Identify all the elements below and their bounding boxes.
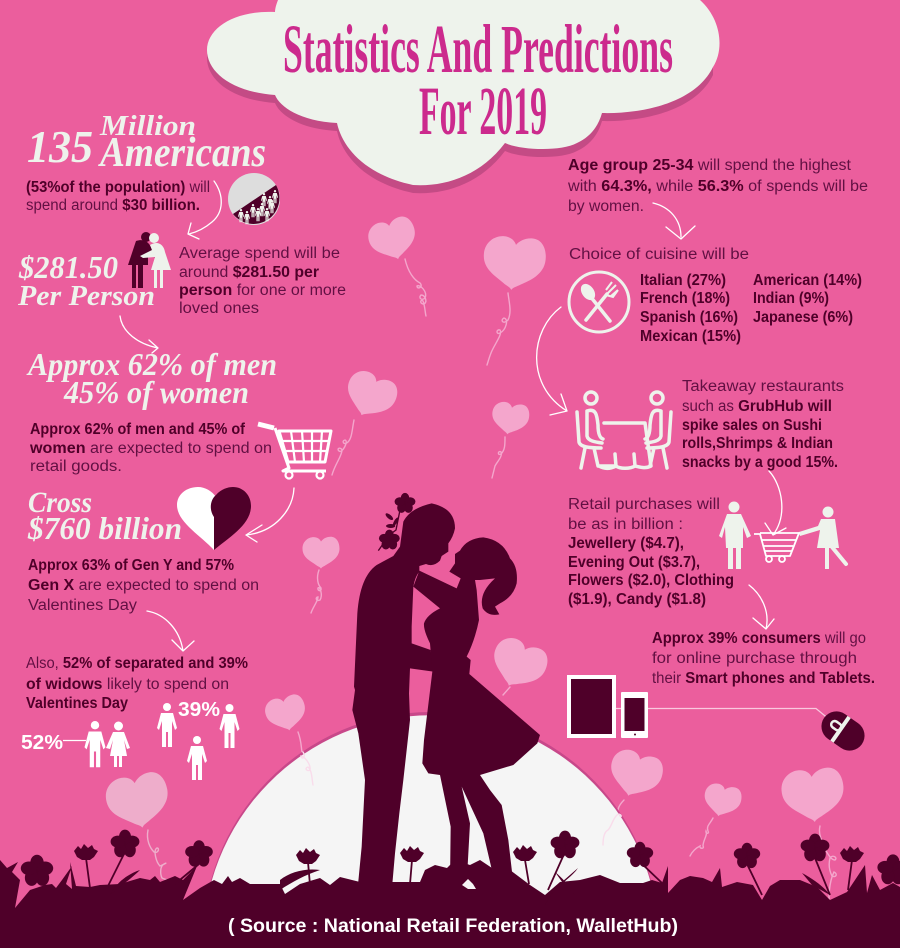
title: For 2019 [419,73,547,149]
text: separated and widows [26,655,248,712]
list: cuisine column one [640,272,741,345]
headline: 135 million Americans: 135 [27,121,93,172]
rose [378,493,415,551]
text: retail purchases: Evening Out ($3.7), [568,554,700,571]
arrow: to average spend [188,181,221,239]
headline: cross $760 billion [27,486,182,546]
arrow: cuisine to table [537,307,567,415]
icon: hugging couple [128,232,171,288]
text: online purchase: for online purchase through [652,650,857,667]
text: choice of cuisine: Choice of cuisine will be [569,246,749,263]
headline: $281.50 per person [17,249,155,312]
stat: 52% separated: 52% [21,732,63,754]
icon: tablet [569,677,614,736]
text: retail purchases: ($1.9), Candy ($1.8) [568,591,706,608]
headline: approx men and women [26,346,277,410]
text: population: spend around $30 billion. [26,197,200,214]
text: separated and widows: Valentines Day [26,695,128,712]
arrow: takeaway to cart [765,471,786,535]
connector line [616,708,830,720]
text: retail purchases: Retail purchases will [568,496,720,513]
headline: $281.50 per person: $281.50 [18,249,118,285]
text: retail purchases: Jewellery ($4.7), [568,535,684,552]
text: gen y and gen x: Valentines Day [28,597,137,614]
text: gen y and gen x: Gen X are expected to spend on [28,577,259,594]
couple silhouette [352,493,540,892]
woman [413,537,540,883]
text: population: (53%of the population) will [26,179,210,196]
balloon 8 [103,770,174,882]
title [283,11,673,149]
text: separated and widows: Also, 52% of separated and 39% [26,655,248,672]
arrow: to heart [246,488,294,542]
headline: cross $760 billion: Cross [28,486,92,519]
headline: cross $760 billion: $760 billion [27,510,182,546]
headline: $281.50 per person: Per Person [17,280,155,312]
text: average spend: around $281.50 per [179,264,319,281]
headline: approx men and women: Approx 62% of men [26,346,277,382]
icon: smartphone [621,692,648,738]
arrow: to cuisine [653,203,695,239]
text: population [26,179,210,214]
text: gen y and gen x: Approx 63% of Gen Y and 57% [28,557,234,574]
text: online purchase: Approx 39% consumers will go [652,630,866,647]
list: cuisine column two: Indian (9%) [753,290,829,307]
text: separated and widows: of widows likely to spend on [26,676,229,693]
text: retail goods: Approx 62% of men and 45% of [30,421,246,438]
headline: 135 million Americans: Americans [97,130,266,176]
stat: 39% widows [157,699,240,780]
man [352,503,455,892]
text: age group [567,157,868,215]
balloon 1 [365,214,426,316]
text: average spend: person for one or more [179,282,346,299]
text: retail goods: retail goods. [30,458,122,475]
balloon 9 string over moon [603,814,621,845]
text: takeaway restaurants: snacks by a good 15%. [682,454,838,471]
text: retail purchases: Flowers ($2.0), Clothing [568,572,734,589]
icon: split heart [177,487,251,550]
stat: 39% widows: 39% [178,699,220,721]
cloud title panel [207,0,720,193]
arrow: to men and women [120,316,158,353]
balloon 7 string over moon [301,752,313,785]
icon: mouse [816,706,870,756]
balloon 2 [480,234,548,365]
text: age group: with 64.3%, while 56.3% of spends will be [567,178,868,195]
arrow: to separated [147,611,194,651]
arrow: retail to online [749,585,774,629]
text: gen y and gen x [28,557,259,614]
icon: shopping cart [258,424,331,478]
headline: 135 million Americans [27,110,266,176]
footer source: ( Source : National Retail Federation, WalletHub) [228,915,678,937]
headline: approx men and women: 45% of women [63,374,249,410]
balloon 6 [484,632,552,697]
stems and leaves [86,852,852,895]
list: cuisine column one: French (18%) [640,290,730,307]
text: online purchase: their Smart phones and Tablets. [652,670,875,687]
text: online purchase [652,630,875,687]
text: average spend [179,245,346,317]
text: takeaway restaurants: rolls,Shrimps & Indian [682,435,833,452]
icon: shoppers with cart [719,502,846,569]
balloon 10 [690,781,744,856]
list: cuisine column two: American (14%) [753,272,862,289]
text: age group: Age group 25-34 will spend the highest [568,157,852,174]
text: takeaway restaurants: Takeaway restaurants [682,378,844,395]
icon: population circle [228,173,280,225]
list: cuisine column two: Japanese (6%) [753,309,853,326]
text: average spend: Average spend will be [179,245,340,262]
flowers [21,855,53,886]
balloon 5 [302,537,340,613]
text: takeaway restaurants [682,378,844,471]
balloon 4 [489,400,531,478]
stat: 52% separated [21,721,130,767]
list: cuisine column one: Spanish (16%) [640,309,738,326]
text: retail purchases: be as in billion : [568,516,683,533]
icon: spoon and fork [569,272,629,332]
balloon 9 [603,745,667,845]
balloon 11 [780,767,846,900]
balloon 3 [332,366,402,475]
balloon 7 [263,693,313,785]
text: takeaway restaurants: such as GrubHub will [682,398,832,415]
list: cuisine column one: Italian (27%) [640,272,726,289]
ground and flowers silhouette [0,830,900,948]
list: cuisine column one: Mexican (15%) [640,328,741,345]
list: cuisine column two [753,272,862,326]
moon gaps [462,879,476,889]
text: retail purchases [568,496,734,608]
text: retail goods: women are expected to spend on [29,440,272,457]
moon hill [203,712,659,948]
text: takeaway restaurants: spike sales on Sushi [682,417,822,434]
text: age group: by women. [568,198,644,215]
text: average spend: loved ones [179,300,259,317]
icon: dining table [577,392,671,468]
headline: 135 million Americans: Million [99,110,196,142]
text: retail goods [29,421,272,475]
